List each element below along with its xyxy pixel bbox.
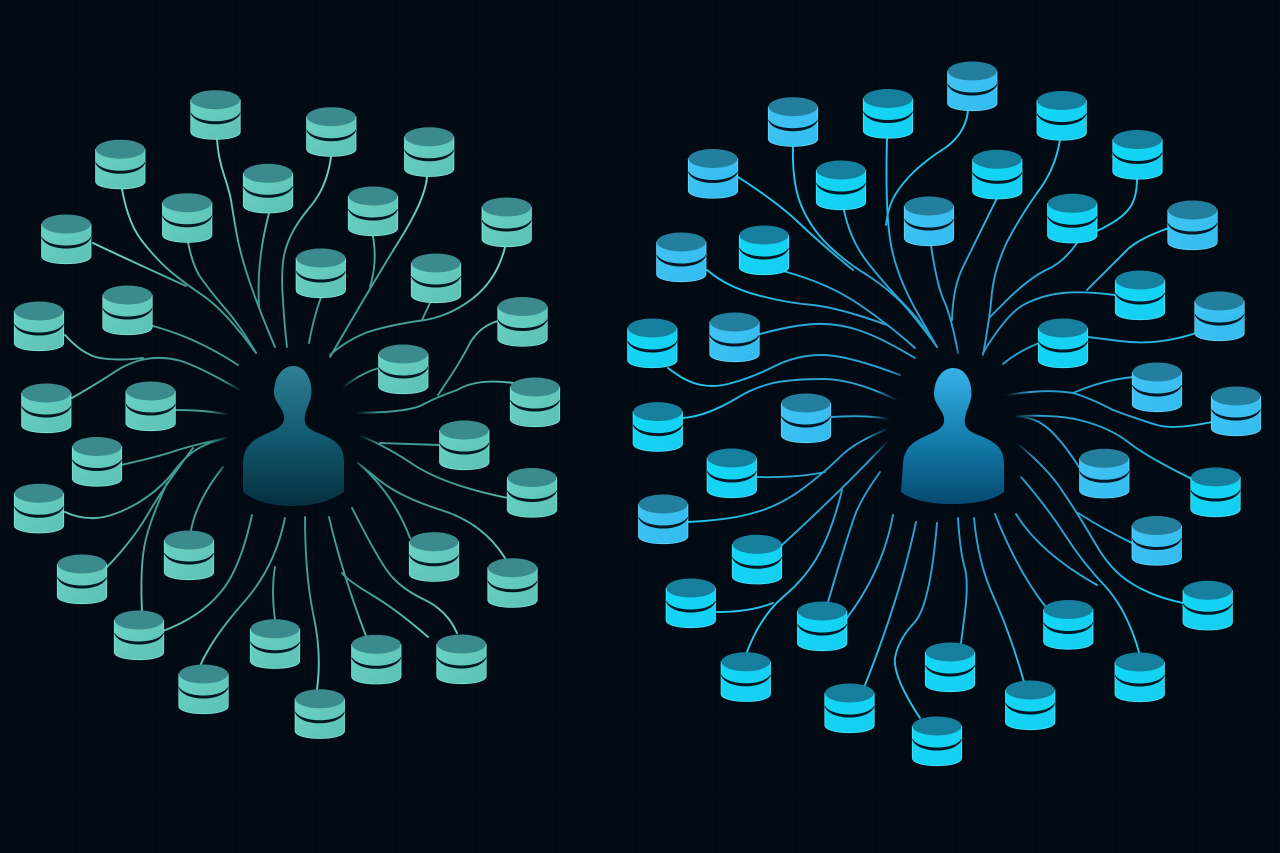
person silhouette: left [243,366,344,506]
database [114,610,164,660]
database [164,530,214,580]
database [1080,449,1129,498]
database [307,107,356,156]
database [710,312,759,362]
connection lines: right network [668,110,1212,718]
database [72,437,122,486]
database [1195,292,1244,341]
database [250,619,300,668]
database [1183,581,1232,630]
database [482,198,531,247]
database [973,150,1022,199]
database [1115,652,1164,702]
database [103,286,152,335]
database [348,186,398,236]
database [440,420,489,470]
database [1168,200,1217,250]
database [948,62,997,111]
database [816,160,866,210]
database [179,664,228,714]
database [628,318,677,368]
database [666,578,716,628]
database [498,297,547,346]
database [126,382,175,431]
database [721,652,770,702]
database [739,226,789,275]
database [191,90,240,139]
database [296,248,346,298]
database [352,635,401,684]
database [781,394,831,443]
database [1191,468,1240,517]
database [488,558,537,607]
database [295,689,344,738]
database [912,716,962,766]
database [688,149,738,198]
database [22,384,71,433]
database [243,164,293,213]
right databases [628,62,1261,766]
database [1113,130,1162,179]
database [1044,600,1093,649]
database [657,232,706,282]
database [1037,91,1086,140]
database [633,402,682,451]
connection lines: left network [65,139,513,689]
database [1048,194,1097,243]
panel: left teal network [14,90,560,738]
database [825,684,874,733]
left databases [14,90,560,738]
database [798,602,847,651]
database [404,127,454,176]
database [411,254,461,303]
database [707,448,756,498]
database [1132,362,1182,412]
database [1006,680,1055,730]
database [1211,386,1261,436]
database [863,89,913,138]
database [638,494,688,544]
database [904,196,954,246]
database [1115,270,1165,320]
database [409,532,459,581]
database [379,344,428,394]
database [14,484,64,533]
database [510,378,560,427]
database [925,642,975,692]
person silhouette: right [901,368,1004,504]
database [96,140,145,189]
database [437,634,486,684]
database [162,193,212,242]
database [57,554,107,604]
database [42,214,91,264]
panel: right blue network [628,62,1261,766]
database [14,302,64,351]
database [507,468,557,517]
database [768,97,818,146]
database [732,535,782,584]
database [1038,318,1088,368]
database [1132,516,1181,565]
